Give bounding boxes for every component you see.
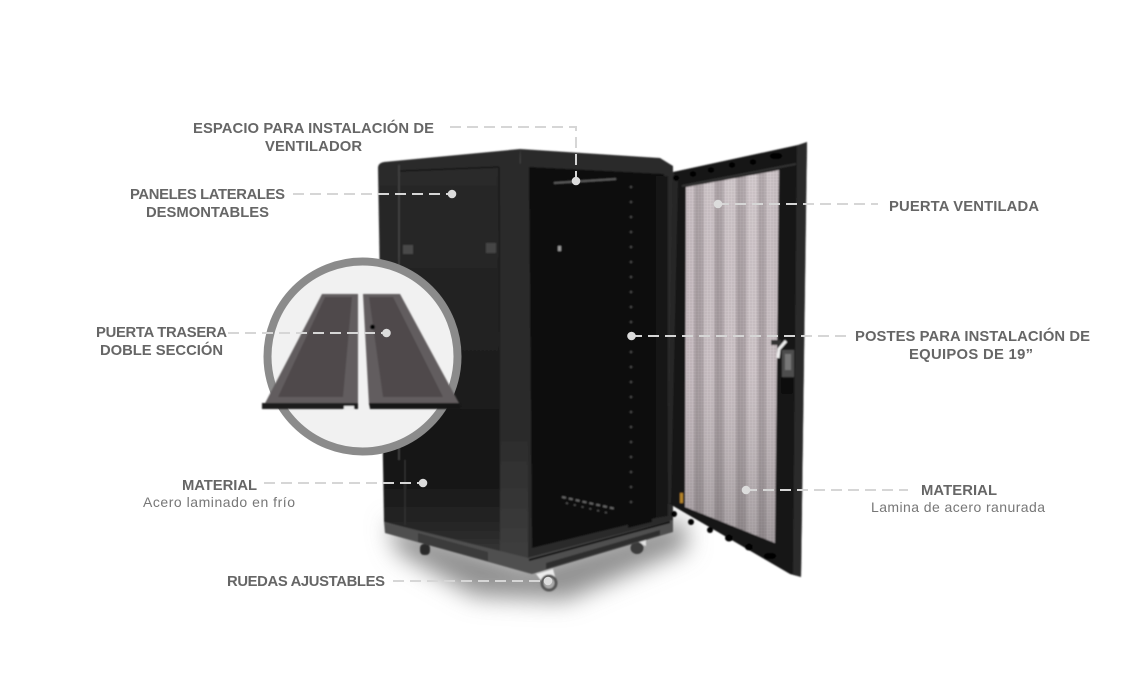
ventilated mesh	[685, 170, 779, 543]
callout: espacio para ventilador	[193, 119, 580, 185]
callout: material left: Acero laminado en frío	[143, 494, 295, 510]
cabinet side panel	[378, 149, 528, 560]
cabinet interior	[529, 167, 664, 548]
cabinet	[378, 142, 807, 590]
callout: material left	[143, 478, 427, 510]
cabinet front frame	[520, 149, 673, 562]
callout: puerta ventilada	[714, 199, 1039, 215]
callout: paneles laterales	[130, 187, 456, 221]
callout: material right: MATERIAL	[921, 483, 997, 499]
callout: ruedas: RUEDAS AJUSTABLES	[227, 574, 385, 590]
door latch	[771, 340, 794, 394]
callout: paneles laterales: DESMONTABLES	[146, 205, 269, 221]
rack holes	[630, 186, 632, 506]
cabinet base	[384, 520, 673, 574]
callout: puerta ventilada: PUERTA VENTILADA	[889, 199, 1039, 215]
rear door left section	[262, 294, 358, 410]
callout: material right	[742, 483, 1045, 515]
casters	[420, 535, 646, 590]
callout: puerta trasera: DOBLE SECCIÓN	[100, 341, 223, 359]
callout: ruedas	[227, 574, 552, 590]
callout: postes: POSTES PARA INSTALACIÓN DE	[855, 327, 1090, 345]
rear door right section	[363, 294, 461, 409]
callout: puerta trasera: PUERTA TRASERA	[96, 325, 227, 341]
callout: espacio para ventilador: VENTILADOR	[265, 139, 362, 155]
callout: material right: Lamina de acero ranurada	[871, 499, 1045, 515]
inset circle: rear door	[262, 262, 461, 452]
floor shadow	[388, 518, 688, 600]
door slots	[671, 153, 782, 559]
callout: postes	[627, 327, 1090, 363]
callout: paneles laterales: PANELES LATERALES	[130, 187, 285, 203]
callout: espacio para ventilador: ESPACIO PARA INSTALACIÓN DE	[193, 119, 434, 137]
callout: puerta trasera	[96, 325, 391, 359]
callout: material left: MATERIAL	[182, 478, 257, 494]
door	[668, 142, 807, 577]
callout: postes: EQUIPOS DE 19”	[909, 347, 1033, 363]
